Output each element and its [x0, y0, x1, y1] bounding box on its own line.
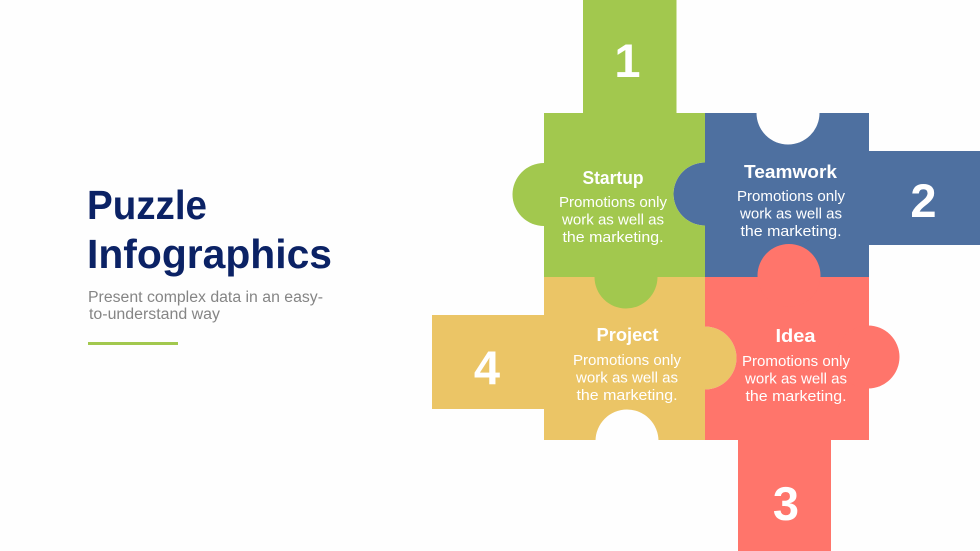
number 2: 2	[910, 174, 937, 227]
subtitle: to-understand way	[89, 306, 220, 323]
piece 2: teamwork (blue)	[674, 113, 980, 277]
subtitle	[88, 289, 323, 323]
text: startup: Promotions only	[559, 194, 667, 211]
text: idea: work as well as	[744, 370, 847, 388]
text: startup: the marketing.	[562, 229, 664, 246]
subtitle: Present complex data in an easy-	[88, 289, 323, 306]
text: project: work as well as	[575, 370, 678, 386]
text: teamwork: work as well as	[739, 206, 842, 222]
text: idea: Idea	[776, 326, 817, 346]
title: Infographics	[87, 231, 332, 277]
text: idea	[742, 326, 850, 405]
title: Puzzle	[87, 182, 207, 228]
puzzle graphic	[432, 0, 980, 551]
text: teamwork	[737, 162, 845, 240]
text: teamwork: Teamwork	[744, 162, 838, 182]
number 4: 4	[474, 341, 500, 394]
text: startup: Startup	[582, 168, 644, 188]
hole in yellow piece	[596, 410, 658, 472]
piece 1: startup (green)	[512, 0, 705, 308]
number 3: 3	[773, 477, 799, 530]
piece 4: project (yellow)	[432, 277, 736, 440]
text: teamwork: Promotions only	[737, 188, 845, 205]
text: project	[573, 325, 681, 404]
text: startup: work as well as	[561, 212, 664, 228]
hole in blue piece	[756, 82, 820, 144]
text: project: the marketing.	[576, 387, 678, 404]
text: project: Promotions only	[573, 352, 681, 369]
text: idea: the marketing.	[746, 388, 846, 405]
title	[87, 182, 332, 277]
text: idea: Promotions only	[742, 353, 850, 370]
number 1: 1	[614, 34, 641, 87]
text: startup	[559, 168, 667, 246]
accent line	[88, 342, 178, 345]
text: project: Project	[596, 325, 658, 345]
text: teamwork: the marketing.	[740, 223, 842, 240]
red top knob	[758, 244, 820, 307]
clear area below yellow hole	[590, 440, 665, 452]
piece 3: idea (red)	[705, 277, 900, 551]
